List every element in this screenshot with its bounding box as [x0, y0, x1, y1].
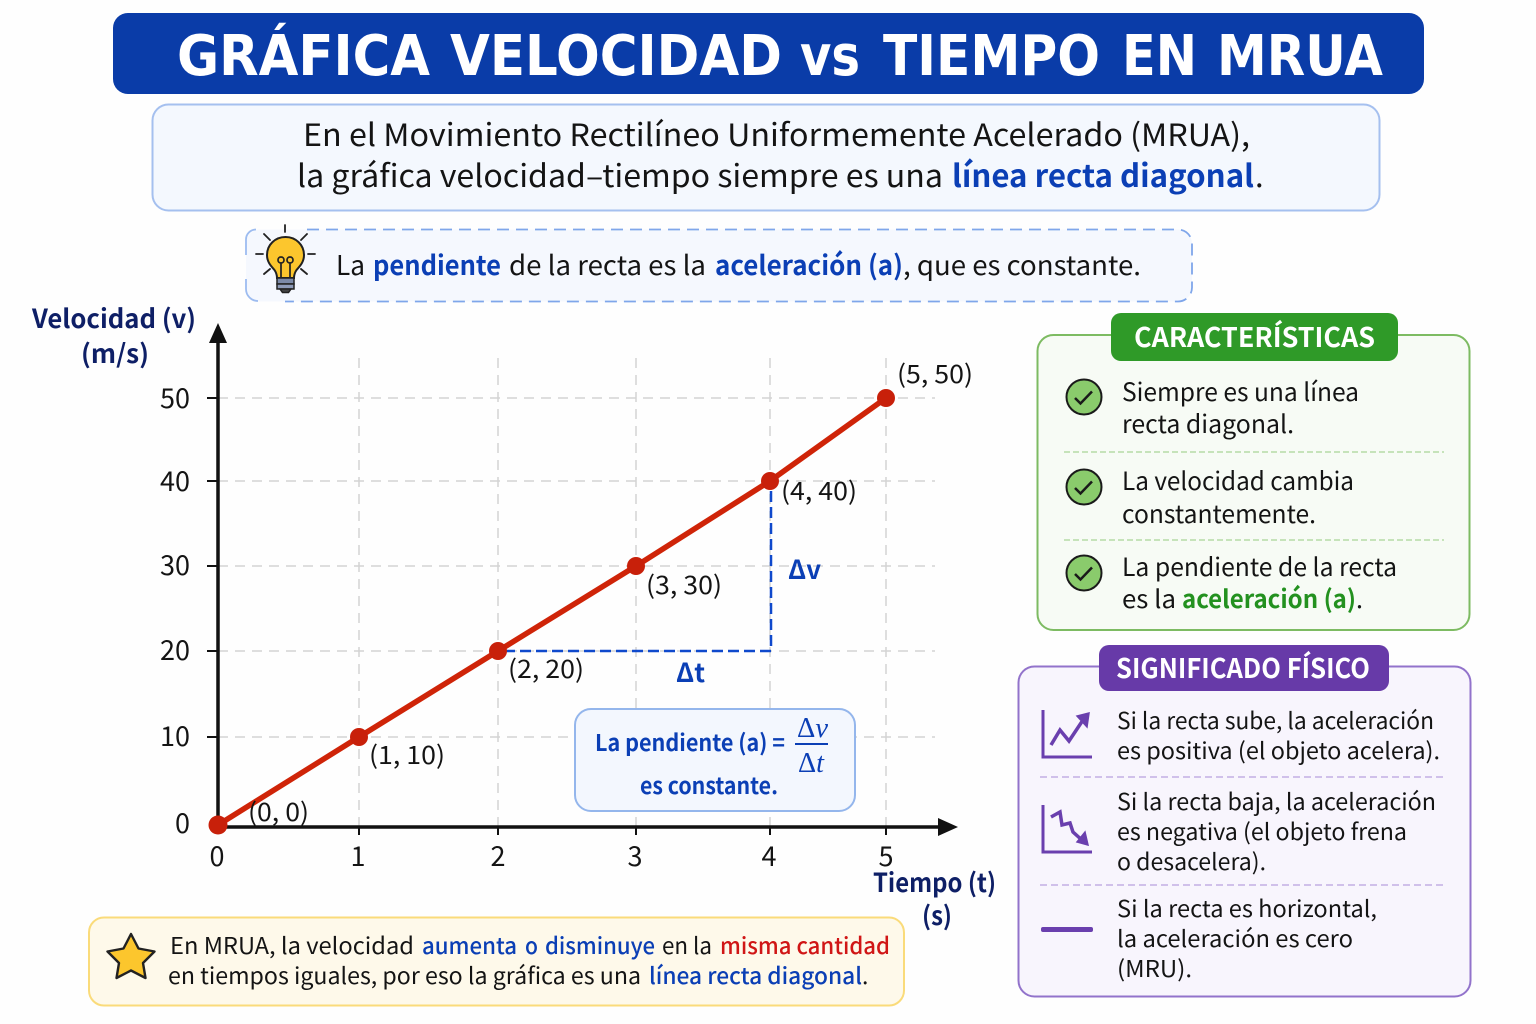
y axis tick labels: 0: [175, 802, 190, 841]
x axis tick labels: 1: [350, 835, 366, 874]
bottom note: disminuye: [545, 927, 655, 961]
x axis tick labels: 2: [490, 835, 506, 874]
item: aceleración cero: [1041, 890, 1377, 984]
y axis tick labels: [160, 377, 190, 841]
item: pendiente: es la: [1122, 580, 1176, 616]
delta triangle: [504, 490, 821, 690]
x axis title: Tiempo (t): [873, 863, 996, 900]
item: aceleración positiva: [1043, 702, 1440, 766]
item: velocidad cambia: La velocidad cambia: [1122, 462, 1354, 498]
title banner: TIEMPO: [883, 24, 1100, 89]
icon: star: [108, 934, 154, 978]
bottom note: .: [862, 957, 868, 991]
tip box: pendiente: de la recta es la: [509, 244, 706, 283]
x axis title: [873, 863, 996, 933]
point labels: (2, 20): [508, 650, 584, 686]
item: aceleración cero: Si la recta es horizontal,: [1117, 890, 1377, 924]
bottom note: en la: [662, 927, 712, 961]
item: pendiente: [1066, 548, 1397, 616]
heading: significado físico: SIGNIFICADO FÍSICO: [1116, 647, 1370, 686]
bottom note: En MRUA, la velocidad: [170, 927, 414, 961]
tip box: pendiente: aceleración (a): [715, 244, 903, 283]
item: línea recta: recta diagonal.: [1122, 405, 1294, 441]
item: línea recta: [1066, 373, 1359, 441]
icon: light bulb: [256, 225, 315, 292]
x axis tick labels: 5: [878, 835, 894, 874]
x axis tick labels: 4: [762, 835, 776, 874]
tip box: pendiente: pendiente: [373, 244, 501, 283]
axes: [207, 323, 958, 836]
title banner: EN: [1122, 24, 1197, 89]
item: pendiente: aceleración (a): [1182, 580, 1356, 616]
y axis tick labels: 20: [160, 629, 190, 668]
x axis title: (s): [922, 896, 952, 933]
heading: características: [1111, 313, 1398, 361]
point labels: (4, 40): [781, 472, 857, 508]
point labels: (0, 0): [248, 793, 309, 829]
item: velocidad cambia: [1066, 462, 1354, 531]
point labels: (3, 30): [646, 566, 722, 602]
panel: significado físico: [1018, 645, 1470, 996]
intro text box: la gráfica velocidad–tiempo siempre es una: [297, 151, 943, 196]
y axis title: (m/s): [81, 334, 149, 371]
y axis title: Velocidad (v): [31, 299, 196, 336]
grid lines: [218, 358, 935, 827]
tip box: pendiente: , que es constante.: [903, 244, 1141, 283]
title banner: vs: [800, 24, 860, 89]
intro text box: [152, 104, 1380, 210]
item: aceleración positiva: Si la recta sube, la aceleración: [1117, 702, 1434, 736]
intro text box: línea recta diagonal: [952, 151, 1254, 196]
point labels: [248, 355, 973, 829]
bottom note: línea recta diagonal: [649, 957, 862, 991]
item: pendiente: .: [1356, 580, 1363, 616]
point labels: (1, 10): [369, 736, 445, 772]
bottom note: o: [525, 927, 538, 961]
item: pendiente: La pendiente de la recta: [1122, 548, 1397, 584]
formula box: Δv: [797, 713, 829, 744]
title banner: GRÁFICA: [177, 24, 431, 89]
title banner: VELOCIDAD: [450, 24, 782, 89]
heading: características: CARACTERÍSTICAS: [1134, 316, 1375, 355]
x axis tick labels: 3: [628, 835, 642, 874]
y axis tick labels: 10: [160, 715, 190, 754]
y axis title: [31, 299, 196, 371]
tip box: pendiente: [246, 225, 1192, 302]
formula box: La pendiente (a) =: [595, 724, 785, 758]
y axis tick labels: 30: [160, 544, 190, 583]
item: aceleración cero: la aceleración es cero: [1117, 920, 1353, 954]
data line: [208, 389, 895, 834]
item: velocidad cambia: constantemente.: [1122, 495, 1316, 531]
delta triangle: Δt: [676, 653, 705, 690]
formula box: es constante.: [640, 767, 778, 801]
item: aceleración negativa: [1043, 783, 1436, 877]
item: aceleración negativa: o desacelera).: [1117, 843, 1266, 877]
item: aceleración negativa: Si la recta baja, la aceleración: [1117, 783, 1436, 817]
intro text box: En el Movimiento Rectilíneo Uniformemente Acelerado (MRUA),: [303, 110, 1250, 155]
x axis tick labels: 0: [210, 835, 224, 874]
title banner: [113, 13, 1424, 94]
title banner: MRUA: [1217, 24, 1384, 89]
item: aceleración positiva: es positiva (el objeto acelera).: [1117, 732, 1440, 766]
intro text box: .: [1255, 151, 1264, 196]
item: aceleración negativa: es negativa (el objeto frena: [1117, 813, 1407, 847]
formula box: Δt: [798, 748, 825, 779]
delta triangle: Δv: [788, 550, 821, 587]
y axis tick labels: 50: [160, 377, 190, 416]
bottom note: [89, 918, 904, 1006]
chart: velocity vs time: [31, 299, 996, 933]
panel: características: [1038, 313, 1470, 630]
item: aceleración cero: (MRU).: [1117, 950, 1192, 984]
item: línea recta: Siempre es una línea: [1122, 373, 1359, 409]
bottom note: en tiempos iguales, por eso la gráfica es una: [168, 957, 641, 991]
y axis tick labels: 40: [160, 460, 190, 499]
bottom note: aumenta: [422, 927, 517, 961]
formula box: [575, 709, 855, 811]
x axis tick labels: [210, 835, 894, 874]
bottom note: misma cantidad: [720, 927, 890, 961]
point labels: (5, 50): [897, 355, 973, 391]
tip box: pendiente: La: [336, 244, 365, 283]
